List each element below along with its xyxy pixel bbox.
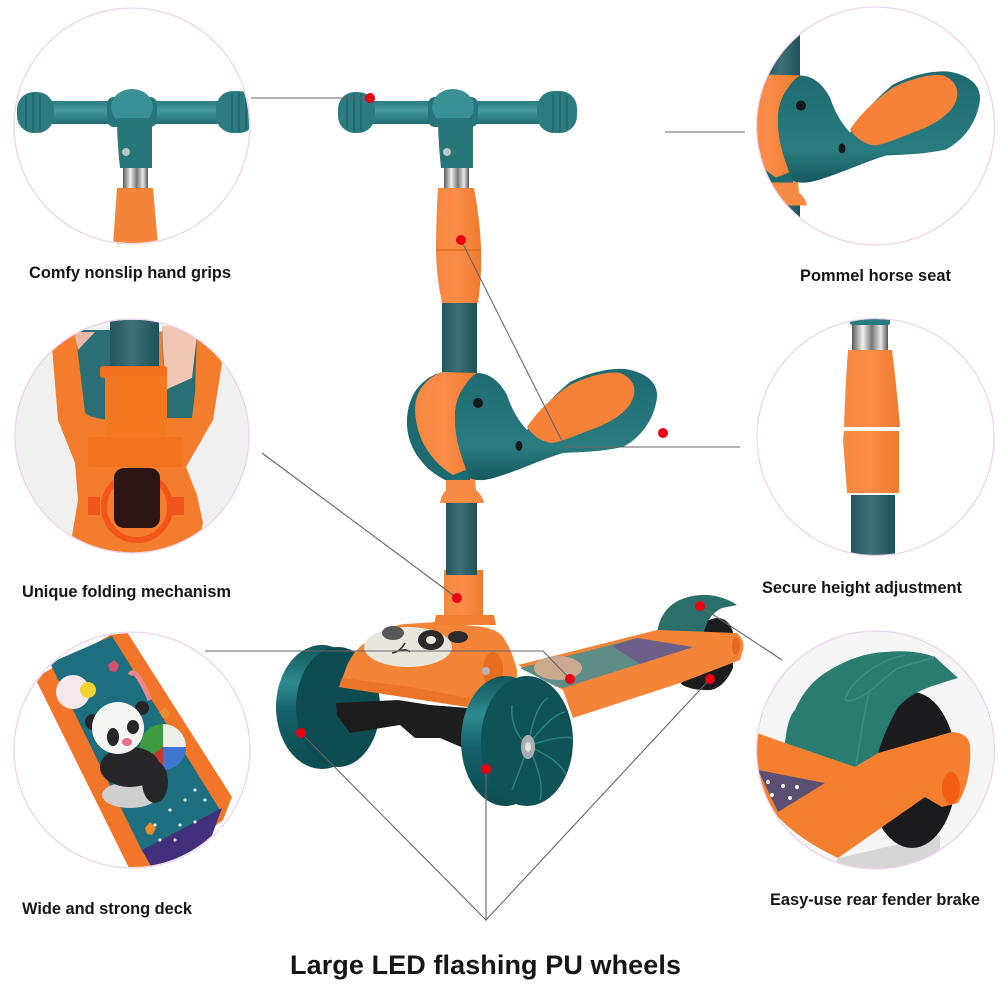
label: brake: Easy-use rear fender brake: [770, 891, 980, 909]
label: wheels: Large LED flashing PU wheels: [290, 950, 681, 980]
upper stem sleeve: [436, 188, 481, 303]
left wheel: [276, 645, 380, 769]
label: folding: Unique folding mechanism: [22, 583, 231, 601]
stem base: [434, 570, 496, 625]
panel: hand grips: [17, 89, 256, 245]
rear wheel: [681, 618, 733, 690]
panel: seat: [757, 35, 980, 217]
seat and stem: [407, 300, 657, 575]
label: hand grips: Comfy nonslip hand grips: [29, 264, 231, 282]
panel: deck: [35, 632, 232, 870]
front body with panda face: [339, 622, 517, 707]
red marker dots: [296, 93, 715, 774]
black axle: [336, 700, 468, 750]
front wheel: [461, 676, 573, 806]
label: seat: Pommel horse seat: [800, 267, 952, 285]
handlebar: [338, 89, 577, 188]
panel: fender brake: [755, 630, 997, 872]
leader lines: [205, 98, 782, 920]
rear fender: [657, 595, 737, 642]
panel: height adjustment: [843, 319, 900, 557]
label: deck: Wide and strong deck: [22, 900, 193, 918]
panel: folding mechanism: [14, 318, 250, 560]
scooter illustration: [276, 89, 743, 806]
deck: [518, 630, 743, 718]
label: height: Secure height adjustment: [762, 579, 963, 597]
